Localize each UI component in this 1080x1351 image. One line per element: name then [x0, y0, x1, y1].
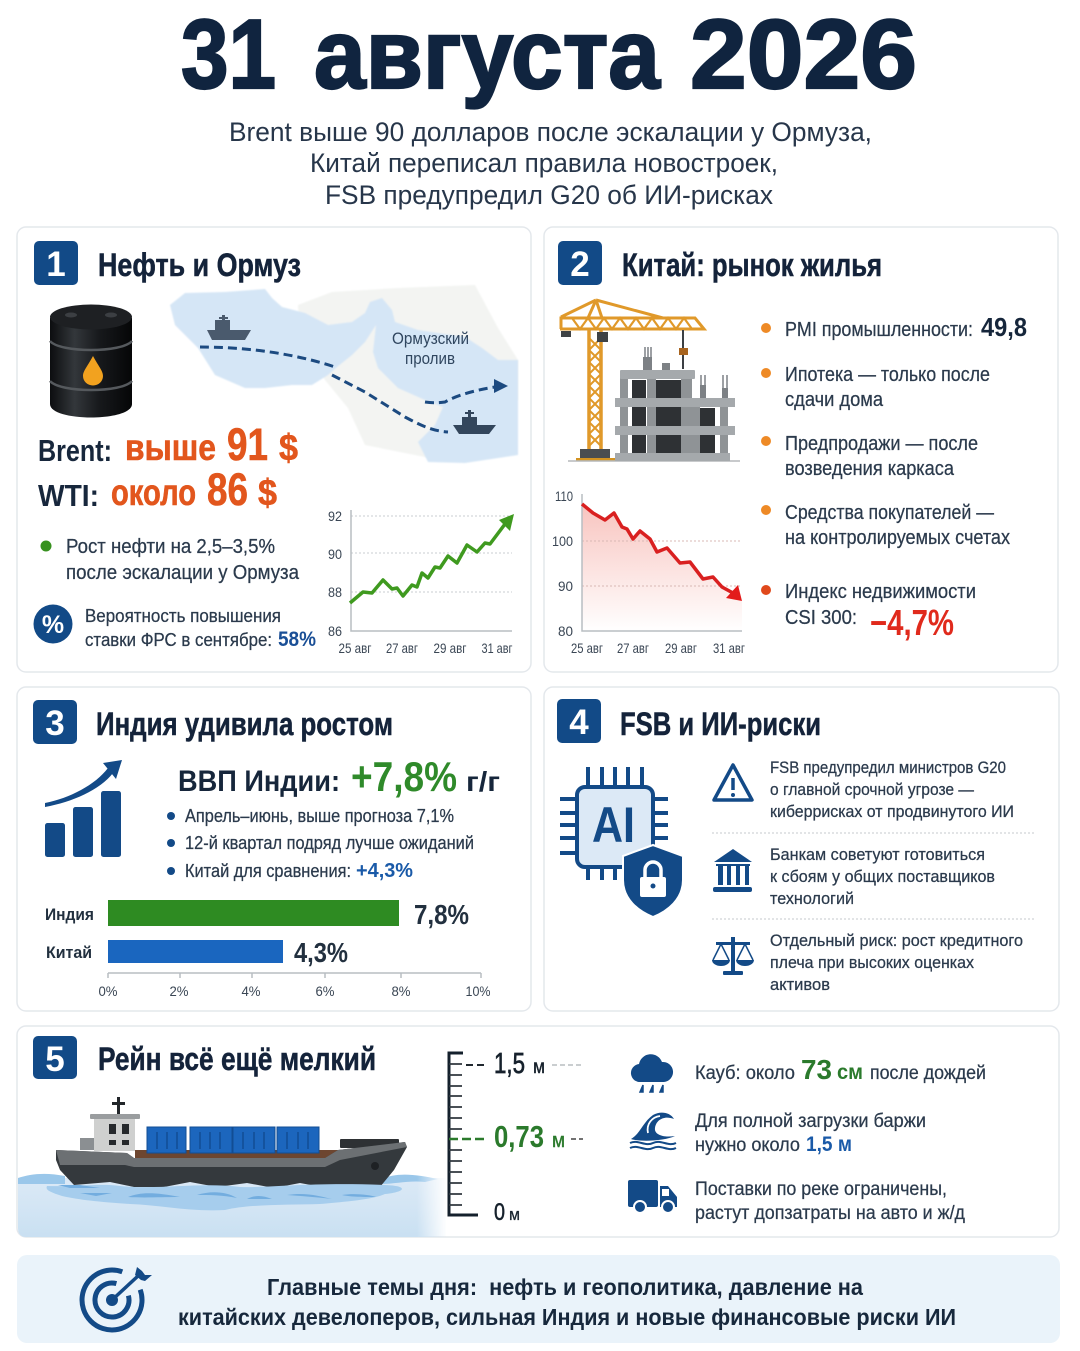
title: августа [314, 0, 661, 109]
section number 2: 2 [570, 245, 590, 284]
bar chart: India vs China GDP: 10% [466, 983, 490, 999]
fact: barge load: нужно около [695, 1135, 800, 1156]
heading: India growth: Индия удивила ростом [96, 706, 393, 742]
fact: Kaub level: после дождей [870, 1063, 986, 1084]
list: China indicators [761, 312, 1027, 643]
bar chart: India vs China GDP: Китай [46, 943, 92, 962]
icon: scales [712, 937, 754, 975]
fact: Kaub level: см [837, 1061, 863, 1084]
panel: India growth [17, 687, 531, 1011]
subtitle: Китай переписал правила новостроек, [310, 148, 778, 178]
icon: AI chip with shield: AI [592, 797, 635, 853]
risk row: leverage [712, 931, 1023, 994]
fact: river supply: Поставки по реке ограничены, [695, 1179, 947, 1200]
section number 3 [33, 700, 77, 744]
bar chart: India vs China GDP: 6% [316, 983, 334, 999]
bar chart: India vs China GDP: 4,3% [294, 937, 348, 968]
line chart: oil price: 25 авг [338, 640, 372, 656]
icon: ship east [453, 410, 496, 434]
India GDP headline: ВВП Индии: [178, 765, 340, 798]
list: China indicators: Средства покупателей — [785, 502, 994, 524]
fact: river supply [628, 1179, 965, 1224]
map label [392, 329, 469, 368]
line chart: property index: 25 авг [571, 640, 603, 656]
bar chart: India vs China GDP: 4% [242, 983, 260, 999]
Fed hike probability: ставки ФРС в сентябре: [85, 630, 272, 650]
list: China indicators: 49,8 [981, 312, 1027, 342]
Brent price: 91 [227, 419, 268, 470]
Brent price: выше [125, 427, 216, 468]
line chart: property index: 100 [552, 533, 573, 549]
icon: crane and building [560, 300, 740, 462]
section number 1 [34, 241, 78, 285]
risk row: cyber threats: о главной срочной угрозе — [770, 780, 974, 799]
list: China indicators: CSI 300: [785, 607, 857, 629]
list: India facts [167, 806, 474, 882]
Fed hike probability: 58% [278, 628, 316, 651]
line chart: oil price: 92 [328, 508, 342, 524]
WTI price [38, 464, 277, 515]
risk row: cyber threats: FSB предупредил министров G20 [770, 758, 1006, 777]
title: 31 [181, 0, 276, 109]
banner: main topics [17, 1255, 1060, 1343]
risk row: leverage: Отдельный риск: рост кредитного [770, 931, 1023, 950]
gauge: water depth: м [552, 1130, 565, 1152]
gauge: water depth: 1,5 [494, 1048, 525, 1080]
bar chart: India vs China GDP: 2% [170, 983, 188, 999]
line chart: property index: 90 [558, 578, 573, 594]
line chart: property index [552, 488, 745, 656]
list: China indicators: сдачи дома [785, 389, 884, 411]
fact: barge load: 1,5 м [806, 1133, 852, 1156]
gauge: water depth: 0 [494, 1199, 505, 1226]
banner text [178, 1274, 956, 1330]
line chart: oil price: 86 [328, 623, 342, 639]
bar chart: India vs China GDP: Индия [45, 905, 94, 924]
heading: China housing: Китай: рынок жилья [622, 247, 882, 283]
illustration: water [18, 1174, 446, 1237]
risk row: leverage: активов [770, 975, 830, 994]
section number 4 [557, 699, 601, 743]
WTI price: 86 [207, 464, 248, 515]
India GDP headline: г/г [466, 766, 500, 797]
Brent price: Brent: [38, 433, 112, 468]
icon: oil barrel [50, 304, 132, 418]
bullet: oil growth: Рост нефти на 2,5–3,5% [66, 536, 275, 558]
Fed hike probability: Вероятность повышения [85, 606, 281, 626]
gauge: water depth [449, 1048, 583, 1226]
gauge: water depth: м [533, 1057, 545, 1078]
bullet: oil growth: после эскалации у Ормуза [66, 562, 300, 584]
list: India facts: +4,3% [356, 860, 413, 882]
gauge: water depth: 0,73 [494, 1119, 544, 1154]
icon: target [82, 1267, 152, 1330]
list: India facts: Китай для сравнения: [185, 861, 351, 881]
line chart: oil price: 27 авг [386, 640, 418, 656]
map label: пролив [405, 349, 455, 368]
section number 2 [558, 241, 602, 285]
list: India facts: Апрель–июнь, выше прогноза 7,1% [185, 806, 454, 826]
panel: FSB and AI risks [544, 687, 1059, 1011]
icon: wave [630, 1113, 676, 1149]
icon: bank [713, 849, 752, 892]
fact: barge load: Для полной загрузки баржи [695, 1111, 926, 1132]
heading: oil and Hormuz: Нефть и Ормуз [98, 247, 301, 283]
line chart: oil price: 31 авг [482, 640, 512, 656]
section number 1: 1 [46, 245, 66, 284]
list: China indicators: −4,7% [870, 602, 954, 643]
list: India facts: 12-й квартал подряд лучше ожиданий [185, 833, 474, 853]
risk row: leverage: плеча при высоких оценках [770, 953, 974, 972]
list: China indicators: Ипотека — только после [785, 364, 990, 386]
list: China indicators: на контролируемых счетах [785, 527, 1010, 549]
risk row: banks: к сбоям у общих поставщиков [770, 867, 995, 886]
icon: AI chip with shield [560, 767, 683, 917]
banner text: Главные темы дня: нефть и геополитика, давление на [267, 1274, 863, 1300]
banner text: китайских девелоперов, сильная Индия и новые финансовые риски ИИ [178, 1304, 956, 1330]
title [181, 0, 917, 109]
heading: FSB and AI risks: FSB и ИИ-риски [620, 706, 821, 742]
WTI price: $ [258, 472, 277, 513]
gauge: water depth: м [509, 1205, 520, 1224]
map: Strait of Hormuz [170, 285, 518, 463]
panel: oil and Hormuz [17, 227, 531, 672]
subtitle: FSB предупредил G20 об ИИ-рисках [325, 180, 773, 210]
line chart: property index: 110 [555, 488, 573, 504]
bullet: oil growth [40, 536, 300, 584]
line chart: property index: 29 авг [665, 640, 697, 656]
line chart: property index: 80 [558, 623, 573, 639]
building body [620, 378, 692, 454]
subtitle [229, 117, 872, 210]
WTI price: около [111, 472, 196, 513]
panel: Rhine water level [17, 1026, 1059, 1237]
line chart: oil price: 90 [328, 546, 342, 562]
icon: warning triangle [714, 765, 752, 800]
Brent price [38, 419, 298, 470]
icon: percent: % [42, 611, 64, 639]
map label: Ормузский [392, 329, 469, 348]
fact: river supply: растут допзатраты на авто и ж/д [695, 1203, 965, 1224]
risk row: cyber threats [714, 758, 1014, 821]
list: China indicators: Индекс недвижимости [785, 581, 976, 603]
line chart: property index: 27 авг [617, 640, 649, 656]
risk row: cyber threats: киберрисках от продвинутого ИИ [770, 802, 1014, 821]
icon: growth bars [45, 760, 122, 857]
icon: truck [628, 1180, 677, 1213]
risk row: banks [713, 845, 995, 908]
bar chart: India vs China GDP: 8% [392, 983, 410, 999]
line chart: oil price [328, 508, 514, 656]
fact: Kaub level [631, 1054, 986, 1092]
Brent price: $ [279, 427, 298, 468]
list: China indicators: возведения каркаса [785, 458, 955, 480]
India GDP headline: +7,8% [351, 753, 457, 800]
illustration: barge [56, 1097, 407, 1188]
bar chart: India vs China GDP: 7,8% [414, 899, 469, 930]
panel: China housing [544, 227, 1058, 672]
heading: Rhine: Рейн всё ещё мелкий [98, 1041, 376, 1077]
icon: percent [34, 604, 72, 644]
fact: barge load [630, 1111, 926, 1156]
risk row: banks: Банкам советуют готовиться [770, 845, 985, 864]
bar chart: India vs China GDP [45, 899, 490, 999]
section number 5: 5 [45, 1040, 65, 1079]
India GDP headline [178, 753, 500, 800]
Fed hike probability [34, 604, 316, 651]
fact: Kaub level: Кауб: около [695, 1063, 795, 1084]
subtitle: Brent выше 90 долларов после эскалации у Ормуза, [229, 117, 872, 147]
list: China indicators: Предпродажи — после [785, 433, 978, 455]
WTI price: WTI: [38, 478, 99, 513]
line chart: oil price: 88 [328, 584, 342, 600]
list: China indicators: PMI промышленности: [785, 319, 973, 341]
section number 4: 4 [569, 703, 589, 742]
section number 5 [33, 1036, 77, 1079]
icon: rain cloud [631, 1054, 673, 1092]
title: 2026 [690, 0, 917, 109]
line chart: oil price: 29 авг [434, 640, 466, 656]
icon: ship west [207, 315, 251, 340]
bar chart: India vs China GDP: 0% [98, 983, 118, 999]
section number 3: 3 [45, 704, 65, 743]
illustration: foreground waves [47, 1184, 402, 1210]
risk row: banks: технологий [770, 889, 854, 908]
fact: Kaub level: 73 [801, 1054, 832, 1085]
line chart: property index: 31 авг [713, 640, 745, 656]
